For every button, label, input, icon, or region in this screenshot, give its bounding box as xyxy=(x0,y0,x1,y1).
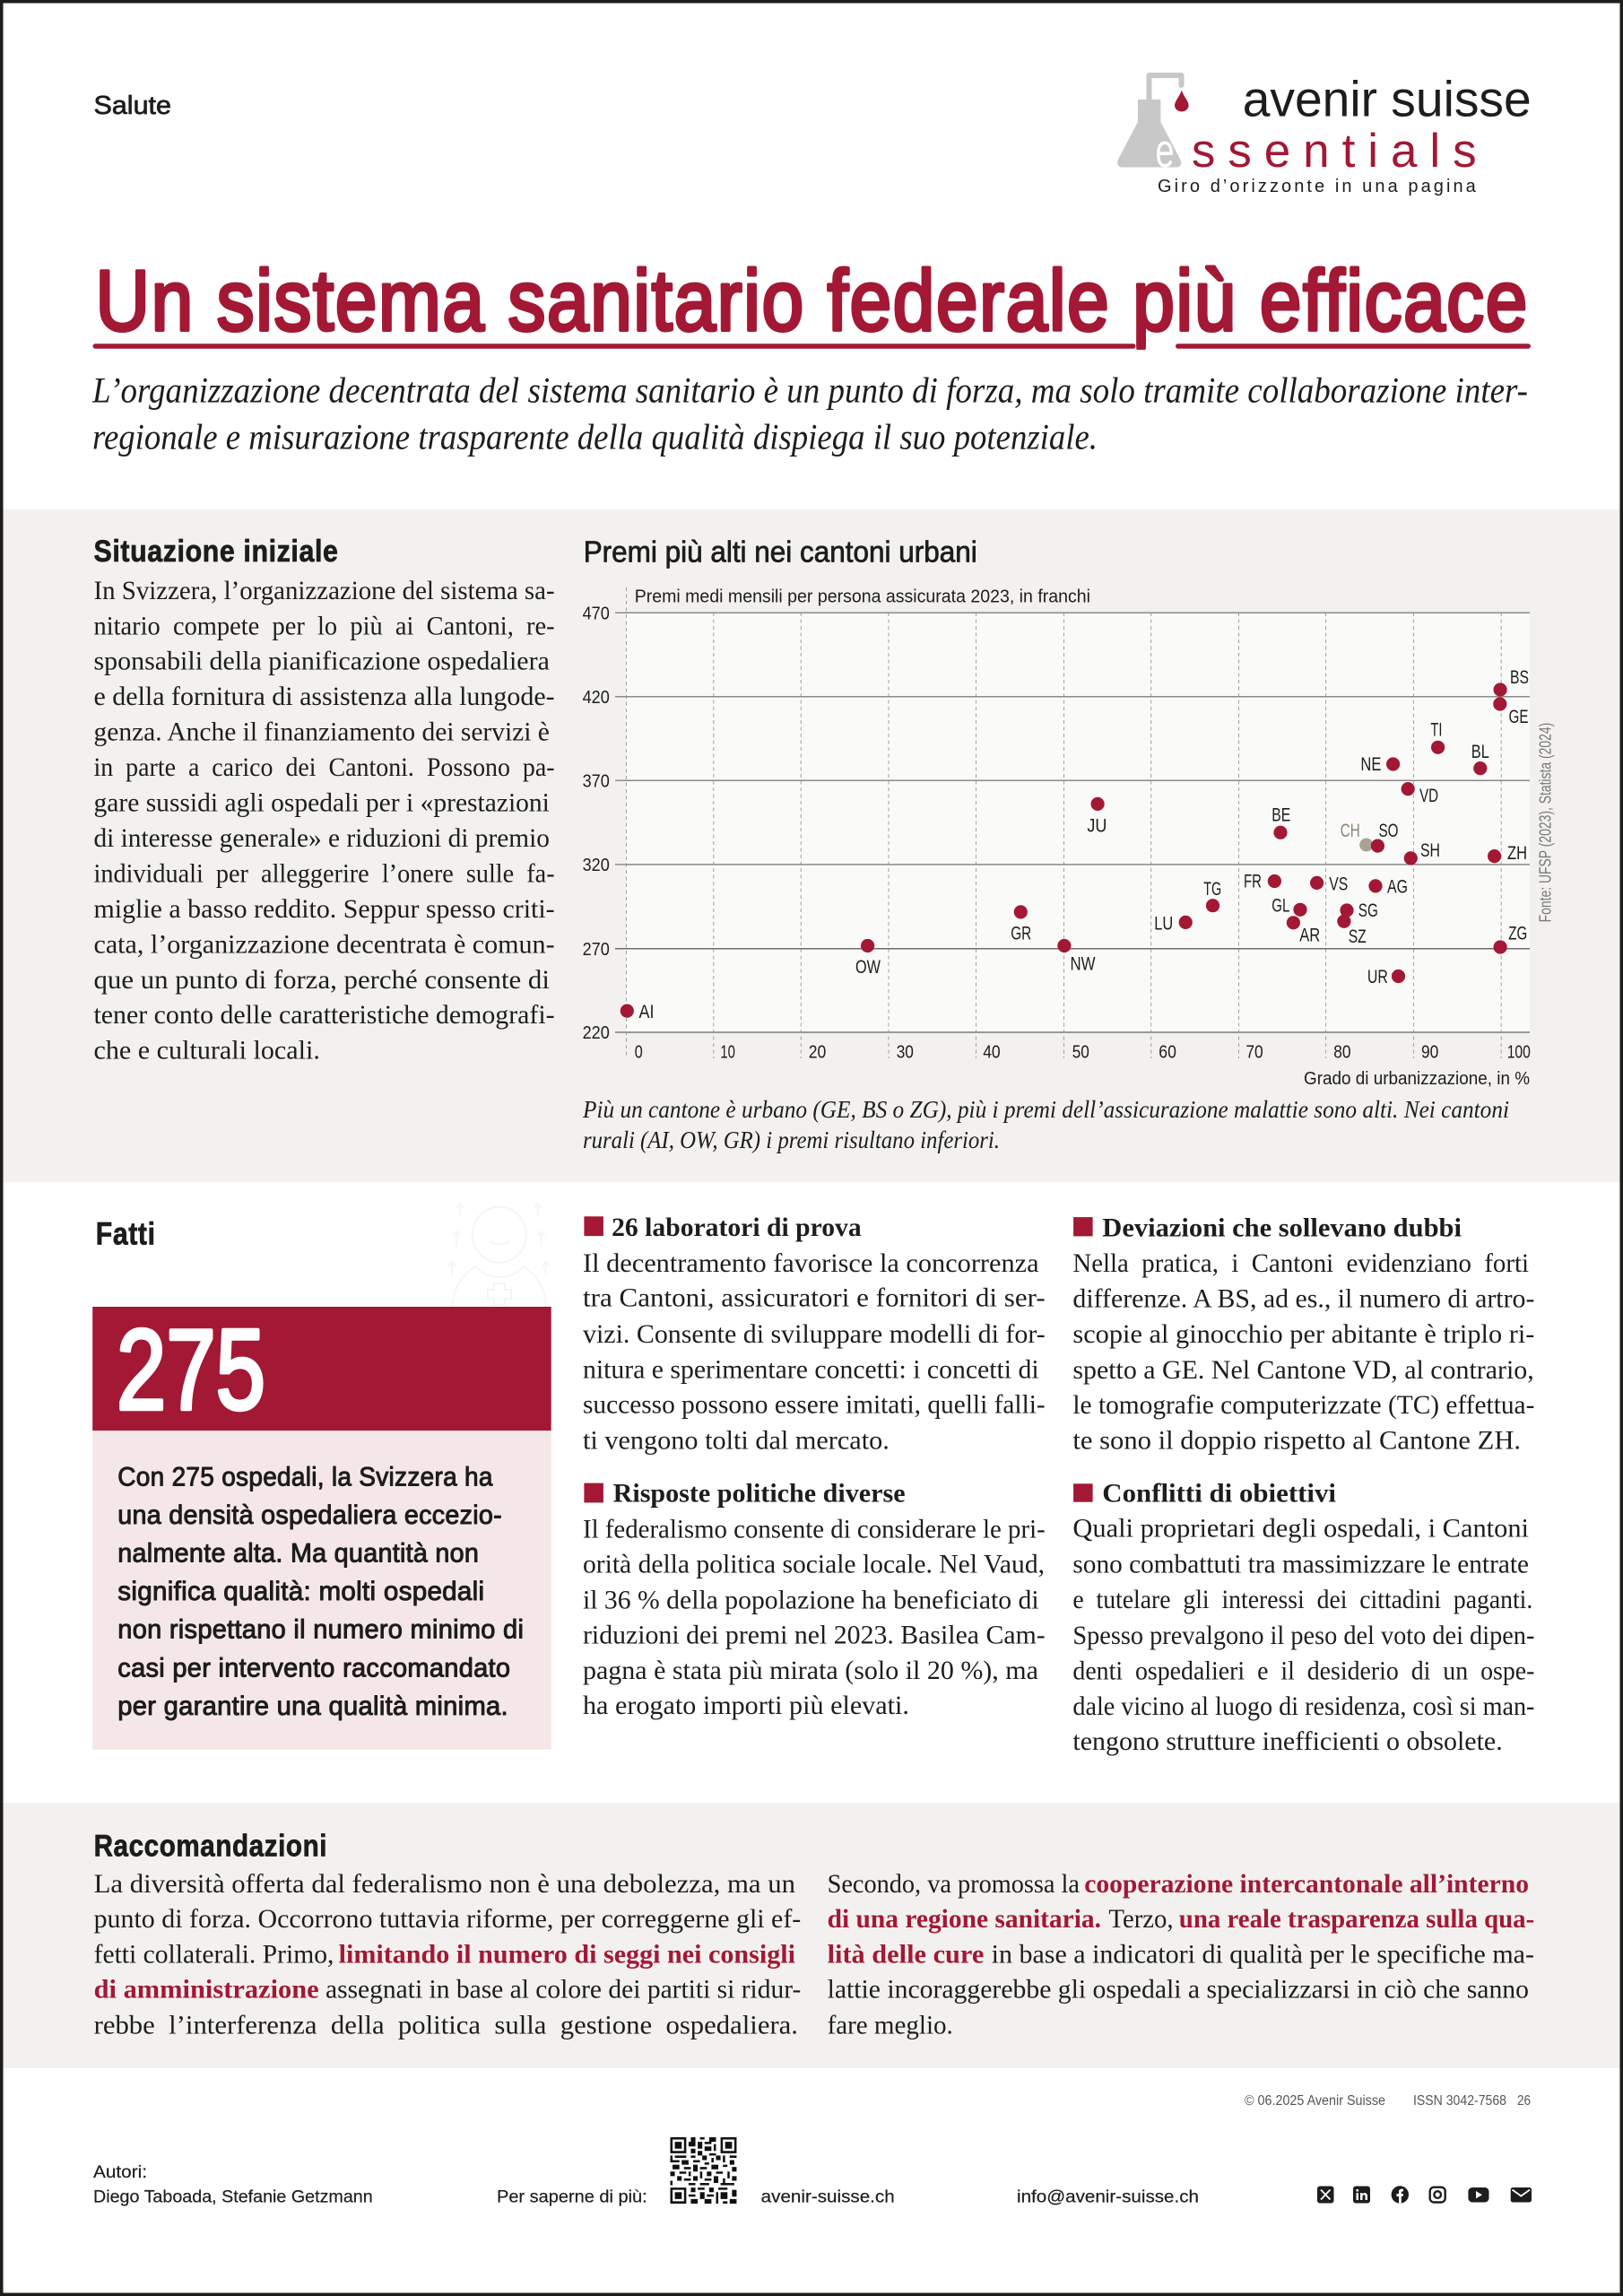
text block: situazione iniziale: genza. Anche il finanziamento dei servizi è xyxy=(93,718,550,747)
website: avenir-suisse.ch xyxy=(761,2188,895,2207)
icon: mail xyxy=(1511,2187,1532,2203)
icon: facebook xyxy=(1392,2186,1409,2204)
tagline: Giro d’orizzonte in una pagina xyxy=(1158,177,1477,196)
chart heading: Premi più alti nei cantoni urbani xyxy=(584,535,977,569)
text column left xyxy=(94,1870,801,2039)
text column right xyxy=(828,1870,1534,2039)
chart caption: rurali (AI, OW, GR) i premi risultano inferiori. xyxy=(583,1126,1000,1153)
data points xyxy=(621,683,1507,1018)
copyright and issn xyxy=(1245,2093,1531,2109)
fact text: successo possono essere imitati, quelli falli- xyxy=(583,1390,1046,1419)
point labels: SG xyxy=(1358,900,1378,921)
grid lines xyxy=(626,587,1501,1058)
text block: situazione iniziale: In Svizzera, l’organizzazione del sistema sa- xyxy=(93,577,555,605)
point labels: VD xyxy=(1419,786,1438,806)
chart caption xyxy=(582,1096,1509,1153)
text column right: lità delle cure xyxy=(828,1940,984,1969)
fact text: te sono il doppio rispetto al Cantone ZH. xyxy=(1072,1426,1521,1455)
x axis title: Grado di urbanizzazione, in % xyxy=(1304,1068,1530,1089)
source note: Fonte: UFSP (2023), Statista (2024) xyxy=(1537,723,1555,922)
chart subtitle: Premi medi mensili per persona assicurata 2023, in franchi xyxy=(635,587,1090,607)
panel: raccomandazioni xyxy=(94,1829,1534,2039)
fact text xyxy=(1072,1249,1534,1455)
callout text xyxy=(117,1463,524,1721)
subtitle: regionale e misurazione trasparente della qualità dispiega il suo potenziale. xyxy=(92,417,1098,457)
copyright and issn: ISSN 3042-7568 xyxy=(1413,2093,1506,2109)
fact heading: 26 laboratori di prova xyxy=(612,1213,862,1242)
point labels: BL xyxy=(1471,742,1489,762)
fact text: differenze. A BS, ad es., il numero di artro- xyxy=(1072,1285,1534,1314)
y axis labels: 420 xyxy=(583,687,610,708)
qr code xyxy=(671,2137,736,2204)
fact: conflitti di obiettivi xyxy=(1072,1480,1534,1756)
point labels: NE xyxy=(1360,754,1381,775)
icon: instagram xyxy=(1430,2187,1445,2203)
fact text: il 36 % della popolazione ha beneficiato di xyxy=(583,1586,1039,1614)
big number: 275 xyxy=(117,1306,265,1433)
fact text: denti ospedalieri e il desiderio di un ospe- xyxy=(1072,1657,1534,1686)
point labels: NW xyxy=(1071,954,1096,974)
text column right: in base a indicatori di qualità per le specifiche ma- xyxy=(992,1940,1534,1969)
fact heading: Conflitti di obiettivi xyxy=(1102,1480,1336,1509)
point labels xyxy=(638,667,1529,1022)
heading: situazione iniziale: Situazione iniziale xyxy=(93,535,339,569)
fact text: ha erogato importi più elevati. xyxy=(583,1692,909,1720)
text column right: Terzo, xyxy=(1108,1905,1174,1934)
point labels: FR xyxy=(1244,871,1262,891)
y axis labels xyxy=(583,603,610,1043)
callout text: una densità ospedaliera eccezio- xyxy=(117,1500,502,1530)
text column left: assegnati in base al colore dei partiti si ridur- xyxy=(325,1976,801,2005)
point labels: GR xyxy=(1011,923,1031,944)
text column left: La diversità offerta dal federalismo non è una debolezza, ma un xyxy=(94,1870,795,1899)
text column left: punto di forza. Occorrono tuttavia riforme, per correggerne gli ef- xyxy=(94,1905,801,1934)
fact text: ti vengono tolti dal mercato. xyxy=(583,1426,890,1455)
x axis labels: 10 xyxy=(720,1042,735,1063)
text block: situazione iniziale: que un punto di forza, perché consente di xyxy=(93,966,550,995)
fact: risposte politiche diverse xyxy=(583,1480,1046,1720)
x axis labels: 0 xyxy=(635,1042,643,1063)
text column right: fare meglio. xyxy=(828,2011,953,2039)
point labels: BE xyxy=(1271,804,1290,825)
point labels: OW xyxy=(855,957,881,978)
fact text: sono combattuti tra massimizzare le entrate xyxy=(1072,1550,1529,1578)
text column left: di amministrazione xyxy=(94,1976,319,2005)
x axis labels: 70 xyxy=(1245,1042,1263,1063)
text block: situazione iniziale: nitario compete per lo più ai Cantoni, re- xyxy=(93,612,555,640)
point labels: LU xyxy=(1154,914,1173,935)
callout text: significa qualità: molti ospedali xyxy=(117,1577,484,1606)
fact text xyxy=(583,1249,1046,1455)
fact: 26 laboratori di prova xyxy=(583,1213,1046,1455)
callout header xyxy=(92,1307,551,1431)
panel: situazione iniziale xyxy=(93,535,555,1065)
point labels: AG xyxy=(1387,876,1408,897)
icon: flask xyxy=(1117,75,1182,167)
icon: x xyxy=(1317,2187,1334,2203)
fact text: nitura e sperimentare concetti: i concetti di xyxy=(583,1356,1039,1385)
fact text: riduzioni dei premi nel 2023. Basilea Cam- xyxy=(583,1622,1046,1650)
point labels: SH xyxy=(1420,840,1440,861)
icon: youtube xyxy=(1468,2187,1488,2203)
authors: Autori: xyxy=(93,2163,147,2182)
fact text: e tutelare gli interessi dei cittadini paganti. xyxy=(1072,1586,1532,1614)
fact text: tengono strutture inefficienti o obsolete. xyxy=(1072,1727,1503,1756)
plot area xyxy=(626,613,1530,1032)
point labels: SO xyxy=(1379,821,1399,841)
fact text: vizi. Consente di sviluppare modelli di for- xyxy=(583,1320,1046,1349)
bullet square xyxy=(1073,1217,1093,1236)
logo: avenir suisse essentials xyxy=(1117,70,1532,196)
y axis labels: 370 xyxy=(583,770,610,791)
text block: situazione iniziale: tener conto delle caratteristiche demografi- xyxy=(93,1001,555,1030)
fact text xyxy=(583,1515,1046,1720)
more info label: Per saperne di più: xyxy=(497,2188,647,2207)
text column right: lattie incoraggerebbe gli ospedali a specializzarsi in ciò che sanno xyxy=(828,1976,1529,2005)
text block: situazione iniziale: gare sussidi agli ospedali per i «prestazioni xyxy=(93,789,550,818)
y axis labels: 320 xyxy=(583,855,610,875)
callout text: Con 275 ospedali, la Svizzera ha xyxy=(117,1463,493,1492)
heading: fatti: Fatti xyxy=(96,1216,156,1251)
text column left: fetti collaterali. Primo, xyxy=(94,1940,334,1969)
email: info@avenir-suisse.ch xyxy=(1017,2188,1199,2207)
heading: raccomandazioni: Raccomandazioni xyxy=(94,1829,327,1863)
fact text: Il decentramento favorisce la concorrenza xyxy=(583,1249,1039,1278)
text column left: limitando il numero di seggi nei consigli xyxy=(339,1940,795,1969)
text column right: una reale trasparenza sulla qua- xyxy=(1179,1905,1534,1934)
x axis labels: 50 xyxy=(1072,1042,1089,1063)
fact text: dale vicino al luogo di residenza, così si man- xyxy=(1072,1692,1534,1721)
point labels: AR xyxy=(1299,926,1320,946)
callout text: non rispettano il numero minimo di xyxy=(117,1615,524,1645)
text block: situazione iniziale: e della fornitura di assistenza alla lungode- xyxy=(93,683,555,711)
section label: Salute: Salute xyxy=(93,91,171,120)
callout text: per garantire una qualità minima. xyxy=(117,1692,508,1721)
fact heading: Risposte politiche diverse xyxy=(613,1480,906,1509)
text column right: Secondo, va promossa la xyxy=(828,1870,1080,1899)
fact text: spetto a GE. Nel Cantone VD, al contrario, xyxy=(1072,1356,1534,1385)
point labels: AI xyxy=(638,1002,655,1022)
chart caption: Più un cantone è urbano (GE, BS o ZG), più i premi dell’assicurazione malattie sono alti. Nei cantoni xyxy=(582,1096,1509,1123)
x axis labels: 60 xyxy=(1159,1042,1176,1063)
fact text: orità della politica sociale locale. Nel Vaud, xyxy=(583,1551,1045,1579)
subtitle xyxy=(91,370,1528,457)
text column left: rebbe l’interferenza della politica sulla gestione ospedaliera. xyxy=(94,2011,798,2039)
point labels: SZ xyxy=(1349,926,1367,947)
authors: Diego Taboada, Stefanie Getzmann xyxy=(93,2188,373,2207)
point labels: VS xyxy=(1329,874,1348,894)
fact text xyxy=(1072,1514,1534,1756)
y axis labels: 220 xyxy=(583,1022,610,1043)
point labels: UR xyxy=(1367,967,1388,987)
icon: blood drop xyxy=(1175,90,1189,111)
bullet square xyxy=(584,1483,603,1502)
wordmark: e of essentials: e xyxy=(1155,125,1175,178)
x axis labels: 90 xyxy=(1421,1042,1438,1063)
fact text: le tomografie computerizzate (TC) effettua- xyxy=(1072,1391,1534,1420)
social icons xyxy=(1317,2186,1532,2204)
x axis labels: 30 xyxy=(897,1042,914,1063)
fact text: Spesso prevalgono il peso del voto dei dipen- xyxy=(1072,1622,1534,1650)
y axis labels: 470 xyxy=(583,603,610,623)
text block: situazione iniziale xyxy=(93,577,555,1065)
fact: deviazioni che sollevano dubbi xyxy=(1072,1213,1534,1455)
fact text: Il federalismo consente di considerare le pri- xyxy=(583,1515,1046,1544)
point labels: TG xyxy=(1203,879,1221,900)
bullet square xyxy=(584,1216,603,1236)
chart: premi e urbanizzazione xyxy=(583,535,1555,1089)
point labels: GL xyxy=(1271,895,1289,916)
point labels: CH xyxy=(1341,821,1360,841)
text block: situazione iniziale: che e culturali locali. xyxy=(93,1037,320,1065)
x axis labels: 20 xyxy=(809,1042,826,1063)
text block: situazione iniziale: individuali per alleggerire l’onere sulle fa- xyxy=(93,859,555,888)
x axis labels: 100 xyxy=(1507,1042,1531,1063)
text column right: di una regione sanitaria. xyxy=(828,1905,1101,1934)
panel: situation and chart background xyxy=(3,509,1620,1182)
fact text: pagna è stata più mirata (solo il 20 %), ma xyxy=(583,1657,1038,1685)
x axis labels xyxy=(635,1042,1531,1063)
text block: situazione iniziale: miglie a basso reddito. Seppur spesso criti- xyxy=(93,895,555,924)
callout text: casi per intervento raccomandato xyxy=(117,1653,510,1683)
text column right: cooperazione intercantonale all’interno xyxy=(1084,1870,1529,1899)
fact heading: Deviazioni che sollevano dubbi xyxy=(1102,1213,1462,1242)
authors xyxy=(93,2163,373,2207)
callout: 275 ospedali xyxy=(92,1306,551,1750)
point labels: ZG xyxy=(1508,923,1527,944)
text block: situazione iniziale: sponsabili della pianificazione ospedaliera xyxy=(93,648,550,676)
point labels: GE xyxy=(1508,707,1528,727)
x axis labels: 80 xyxy=(1333,1042,1350,1063)
point labels: TI xyxy=(1430,719,1442,741)
bullet square xyxy=(1073,1483,1093,1502)
fact text: Quali proprietari degli ospedali, i Cantoni xyxy=(1072,1514,1529,1543)
fact text: Nella pratica, i Cantoni evidenziano forti xyxy=(1072,1249,1529,1278)
subtitle: L’organizzazione decentrata del sistema sanitario è un punto di forza, ma solo tramite collaborazione inter- xyxy=(91,370,1528,410)
point labels: JU xyxy=(1087,816,1107,836)
icon: faint person with swiss cross xyxy=(448,1204,550,1307)
text block: situazione iniziale: cata, l’organizzazione decentrata è comun- xyxy=(93,930,555,959)
text block: situazione iniziale: di interesse generale» e riduzioni di premio xyxy=(93,824,550,853)
text block: situazione iniziale: in parte a carico dei Cantoni. Possono pa- xyxy=(93,753,555,782)
copyright and issn: 26 xyxy=(1517,2093,1531,2109)
wordmark: ssentials: ssentials xyxy=(1192,125,1477,178)
icon: linkedin xyxy=(1353,2187,1370,2203)
wordmark: avenir suisse: avenir suisse xyxy=(1243,70,1532,126)
callout text: nalmente alta. Ma quantità non xyxy=(117,1539,479,1569)
copyright and issn: © 06.2025 Avenir Suisse xyxy=(1245,2093,1385,2109)
x axis labels: 40 xyxy=(983,1042,1001,1063)
point labels: BS xyxy=(1510,667,1529,688)
y axis labels: 270 xyxy=(583,939,610,960)
fact text: tra Cantoni, assicuratori e fornitori di ser- xyxy=(583,1284,1046,1313)
point labels: ZH xyxy=(1507,843,1527,864)
fact text: scopie al ginocchio per abitante è triplo ri- xyxy=(1072,1320,1534,1349)
callout body xyxy=(92,1431,551,1750)
panel: recommendations background xyxy=(3,1803,1620,2068)
